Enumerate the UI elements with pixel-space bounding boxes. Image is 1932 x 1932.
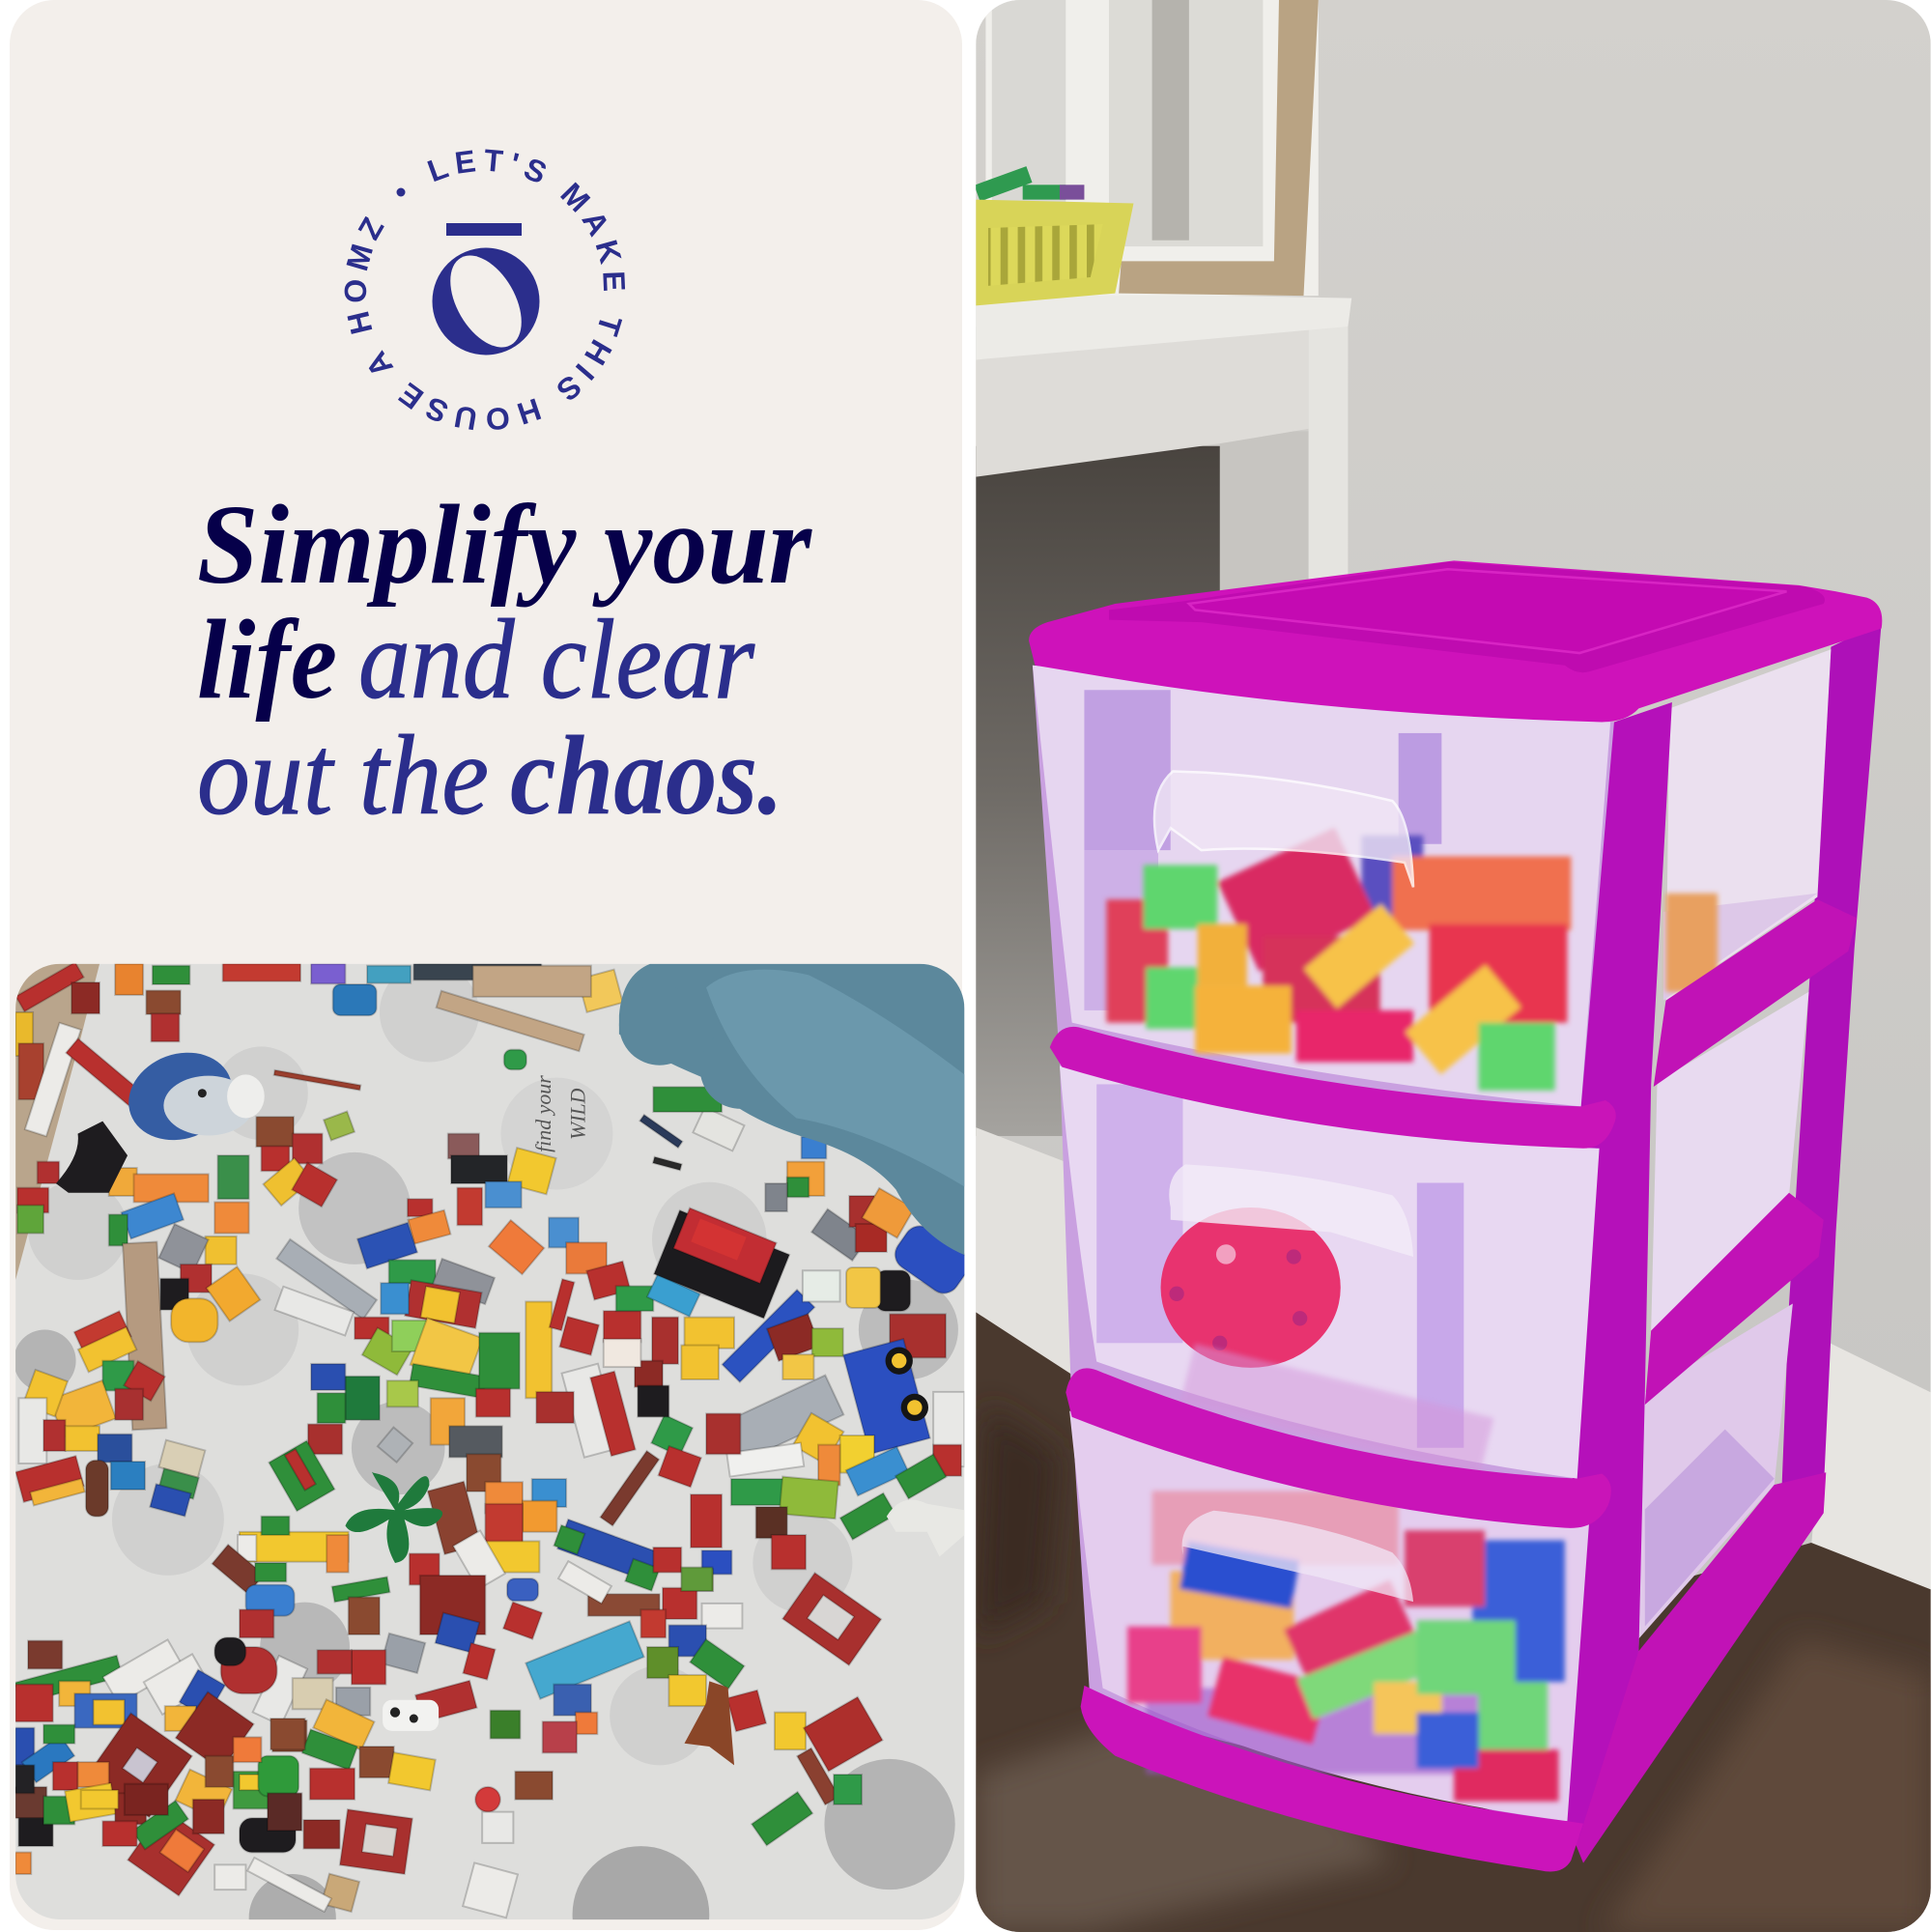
toy zebra — [887, 1500, 964, 1557]
bottom base rim — [1081, 1686, 1583, 1871]
drawer two handle — [1169, 1164, 1413, 1257]
rug lettering: WILD — [565, 1088, 589, 1140]
line two: life — [197, 596, 337, 723]
cabinet body — [1033, 666, 1669, 1848]
second drawer rim — [1050, 1027, 1616, 1149]
yellow basket with crayons — [974, 166, 1133, 305]
bricks — [14, 962, 975, 1918]
line one: Simplify your — [197, 481, 812, 608]
line three: out the — [197, 712, 489, 838]
rug lettering — [535, 1075, 585, 1152]
logo: circular badge — [344, 149, 626, 431]
logo ring text: LET'S MAKE THIS HOUSE A HOMZ — [344, 149, 626, 431]
rug spots — [14, 962, 958, 1932]
drawer three handle — [1182, 1511, 1413, 1602]
logo mark: o with macron — [433, 223, 539, 359]
toy deer — [685, 1681, 734, 1765]
red ball — [1161, 1208, 1341, 1368]
panel: right photo of purple storage drawers — [974, 0, 1931, 1932]
green plant — [345, 1472, 442, 1563]
rug lettering: find your — [531, 1075, 555, 1152]
room background — [976, 0, 1931, 1932]
logo dot — [396, 187, 406, 197]
rear post — [1780, 622, 1882, 1521]
third drawer rim — [1065, 1368, 1611, 1528]
side panels of the cabinet — [1638, 649, 1831, 1638]
top frame and lid — [1029, 560, 1882, 722]
panel: left cream card — [10, 0, 962, 1930]
toy cow — [383, 1700, 439, 1731]
photo: scattered toy bricks on a rug — [14, 962, 975, 1932]
floorboard streaks — [976, 1405, 1931, 1932]
toy train cab — [691, 1218, 747, 1261]
drawer two — [1060, 1065, 1600, 1479]
large teal plush toy — [619, 964, 964, 1255]
blue fuzzy plush — [128, 1053, 265, 1140]
side rails — [1567, 899, 1857, 1863]
drawer three — [1069, 1410, 1589, 1821]
line two — [197, 596, 755, 723]
line two: and clear — [358, 596, 755, 723]
headline — [197, 481, 812, 838]
framed art — [985, 0, 1319, 296]
line three — [197, 712, 783, 838]
drawer one handle — [1154, 771, 1413, 887]
line three: chaos. — [510, 712, 783, 838]
front corner post — [1565, 702, 1672, 1836]
drawer one — [1033, 666, 1610, 1106]
black toy horse — [56, 1122, 128, 1193]
